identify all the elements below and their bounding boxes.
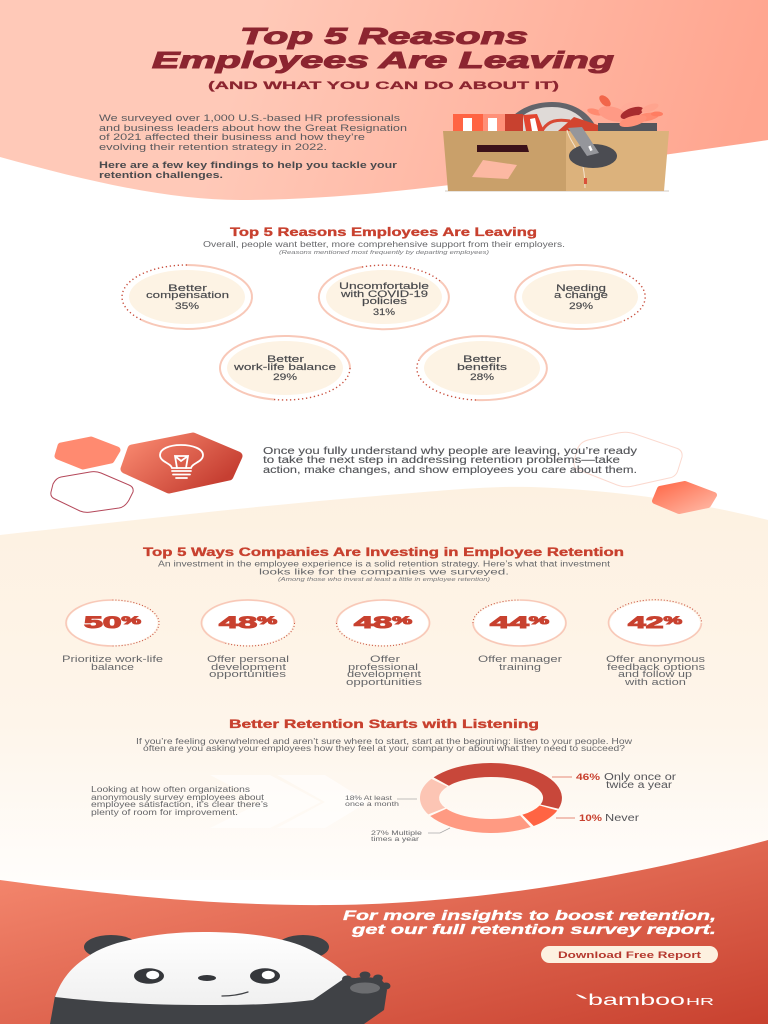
listening description <box>136 737 632 753</box>
label: 46% <box>552 772 677 791</box>
paw <box>342 972 390 997</box>
box shadow <box>445 190 669 192</box>
stat: 42%: feedback options <box>607 662 706 672</box>
stat: 42%: with action <box>624 677 686 687</box>
stat: 44% <box>473 600 566 672</box>
call to action: For more insights to boost retention, <box>343 907 716 923</box>
stat: 48% professional: development <box>347 669 422 679</box>
string <box>567 130 585 188</box>
plant leaves <box>586 93 663 129</box>
hexagon: outline <box>51 472 133 512</box>
reason: work-life balance: 29% <box>273 372 297 382</box>
reason: work-life balance: work-life balance <box>232 362 336 372</box>
smile <box>222 992 248 996</box>
stat: 50%: % <box>122 615 141 627</box>
logo: bambooHR: HR <box>686 997 714 1008</box>
callout text: Once you fully understand why people are leaving, you’re ready <box>263 446 637 457</box>
survey frequency text: anonymously survey employees about <box>91 793 265 802</box>
stat: 50% <box>62 600 163 672</box>
reason: needing a change: a change <box>554 290 608 300</box>
heading: top 5 reasons: Top 5 Reasons Employees Are Leaving <box>230 225 537 239</box>
reason: better compensation <box>122 265 252 329</box>
tape disc <box>569 144 617 168</box>
label: 18% <box>345 795 417 808</box>
box handle slot <box>477 145 529 152</box>
eyes <box>134 968 280 984</box>
donut chart <box>420 763 562 833</box>
chevrons <box>210 775 368 828</box>
label: 10%: Never <box>605 813 640 824</box>
logo: bambooHR <box>576 992 714 1009</box>
binders <box>453 114 544 131</box>
subtitle: (AND WHAT YOU CAN DO ABOUT IT) <box>208 80 560 92</box>
stat: 48% personal: development <box>211 662 287 672</box>
label: 27%: times a year <box>371 836 420 843</box>
intro text: Here are a few key findings to help you tackle your <box>99 160 397 171</box>
ears <box>84 935 329 959</box>
intro text: evolving their retention strategy in 2022. <box>99 142 327 153</box>
stat: 48% professional: Offer <box>370 654 400 664</box>
reason: covid: Uncomfortable <box>339 281 429 291</box>
stat: 42%: Offer anonymous <box>606 654 706 664</box>
title: Top 5 Reasons <box>240 23 528 49</box>
stat: 48% professional: opportunities <box>346 677 423 687</box>
survey frequency text: employee satisfaction, it’s clear there’s <box>91 800 268 809</box>
reason: better compensation: compensation <box>146 290 229 300</box>
heading: ways companies invest: Top 5 Ways Companies Are Investing in Employee Retention <box>143 545 624 559</box>
stat: 48% professional: 48 <box>354 613 373 632</box>
logo: bambooHR: bamboo <box>588 992 685 1009</box>
stat: 42%: % <box>664 615 682 627</box>
reason: work-life balance: Better <box>267 354 304 364</box>
note: (Reasons mentioned most frequently by departing employees) <box>279 250 489 256</box>
reason: needing a change: 29% <box>569 301 593 311</box>
label: 27% <box>371 828 450 843</box>
callout text: action, make changes, and show employees you care about them. <box>263 465 637 476</box>
stat: 48% professional: % <box>392 615 412 627</box>
gray strip <box>568 127 599 156</box>
stat: 44%: % <box>529 615 549 627</box>
listening description: If you’re feeling overwhelmed and aren’t sure where to start, start at the beginning: listen to your people. How <box>136 737 632 746</box>
intro text: retention challenges. <box>99 170 223 181</box>
button <box>541 946 718 963</box>
stat: 48% personal: 48 <box>219 613 238 632</box>
reason: better benefits: Better <box>463 354 501 364</box>
reason: better benefits <box>417 336 547 400</box>
label: 46%: twice a year <box>606 780 673 791</box>
callout text: to take the next step in addressing retention problems—take <box>263 455 621 466</box>
hexagon: red gradient <box>655 484 714 511</box>
panda mascot <box>50 932 390 1024</box>
body <box>50 977 387 1024</box>
intro text: and business leaders about how the Great Resignation <box>99 123 407 134</box>
title: Employees Are Leaving <box>152 47 614 73</box>
investment description <box>158 560 611 583</box>
label: 10%: 10% <box>579 813 603 824</box>
stat: 48% personal <box>202 600 294 679</box>
button: Download Free Report <box>558 950 702 961</box>
hexagon: coral <box>58 440 117 466</box>
intro text: of 2021 affected their business and how they’re <box>99 132 365 143</box>
call to action: get our full retention survey report. <box>350 921 716 937</box>
subheading: Overall, people want better, more comprehensive support from their employers. <box>203 240 565 249</box>
stat: 42%: 42 <box>628 613 647 632</box>
icon: lightbulb hexagon <box>125 437 238 489</box>
survey frequency text: Looking at how often organizations <box>91 785 250 794</box>
reason: needing a change <box>515 265 645 329</box>
stat: 48% professional: professional <box>348 662 418 672</box>
stat: 44%: training <box>499 662 541 672</box>
reason: better benefits: 28% <box>470 372 494 382</box>
stat: 48% personal: Offer personal <box>207 654 289 664</box>
label: 46%: Only once or <box>604 772 677 783</box>
nose <box>198 975 216 981</box>
box right face <box>566 131 669 191</box>
reason: covid: policies <box>362 296 408 306</box>
reason: work-life balance <box>220 336 350 400</box>
header background <box>0 0 768 200</box>
hexagon: faint outline <box>574 432 682 487</box>
reason: better compensation: 35% <box>175 301 199 311</box>
stat: 50%: 50 <box>84 613 103 632</box>
icon: moving box with office items <box>443 93 669 192</box>
investment description: An investment in the employee experience is a solid retention strategy. Here’s what that investment <box>158 560 611 568</box>
stat: 48% personal: % <box>257 615 277 627</box>
reason: covid: with COVID-19 <box>340 289 428 299</box>
investment description: looks like for the companies we surveyed. <box>259 568 509 576</box>
clock <box>503 102 598 131</box>
reason: better compensation: Better <box>168 283 207 293</box>
stat: 48% personal: opportunities <box>209 669 287 679</box>
cream section background <box>0 487 768 880</box>
stat: 42%: and follow up <box>618 669 692 679</box>
callout text <box>263 446 637 476</box>
red cord <box>542 120 570 131</box>
listening description: often are you asking your employees how they feel at your company or about what they need to succeed? <box>143 744 626 753</box>
stat: 48% professional <box>336 600 429 687</box>
investment description: (Among those who invest at least a little in employee retention) <box>278 577 490 583</box>
title <box>152 23 614 73</box>
call to action <box>343 907 716 937</box>
stat: 50%: Prioritize work-life <box>62 654 163 664</box>
footer background <box>0 840 768 1024</box>
label: 10% <box>556 813 640 824</box>
reason: needing a change: Needing <box>556 283 606 293</box>
reason: covid: 31% <box>373 307 395 317</box>
reason: better benefits: benefits <box>457 362 508 372</box>
label: 46%: 46% <box>576 772 601 783</box>
intro text <box>99 113 407 181</box>
survey frequency text: plenty of room for improvement. <box>91 808 238 817</box>
stat: 44%: 44 <box>490 613 509 632</box>
label: 18%: 18% At least <box>345 795 392 802</box>
heading: better retention: Better Retention Starts with Listening <box>229 717 539 731</box>
lightbulb <box>160 445 203 478</box>
box left face <box>443 131 566 191</box>
stat: 42% <box>606 600 706 687</box>
label: 27%: 27% Multiple <box>371 830 423 837</box>
label: 18%: once a month <box>345 801 400 808</box>
reason: covid <box>319 265 449 329</box>
dark tray <box>598 123 657 131</box>
stat: 50%: balance <box>91 662 134 672</box>
stat: 44%: Offer manager <box>478 654 562 664</box>
intro text: We surveyed over 1,000 U.S.-based HR professionals <box>99 113 400 124</box>
sticky note <box>472 160 517 179</box>
head <box>55 932 347 1005</box>
survey frequency text <box>91 785 268 817</box>
